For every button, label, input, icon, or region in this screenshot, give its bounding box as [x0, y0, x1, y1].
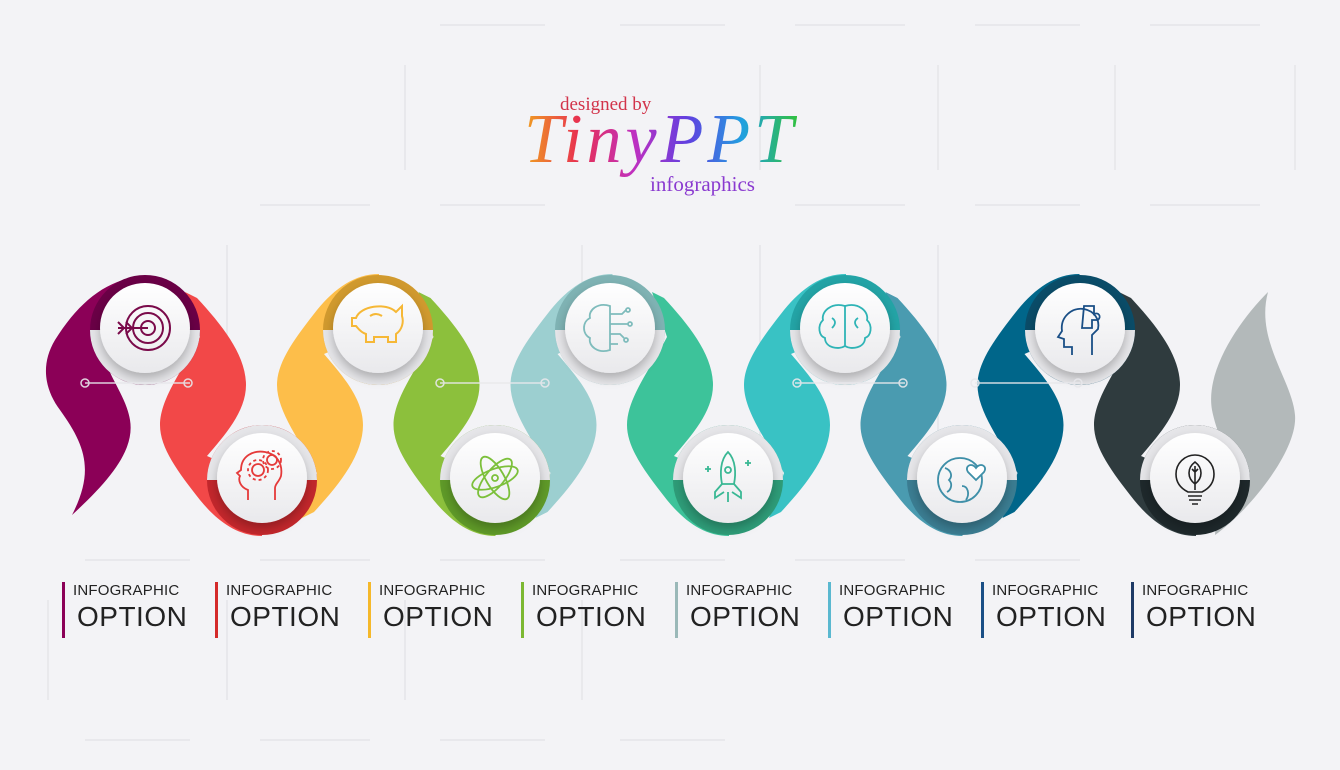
circle 2: gear head	[207, 425, 317, 535]
circle 10: bulb	[1140, 425, 1250, 535]
text: INFOGRAPHIC	[992, 582, 1098, 599]
circle 3: piggy bank	[323, 275, 433, 385]
circle 1: target	[90, 275, 200, 385]
text: INFOGRAPHIC	[226, 582, 332, 599]
circle 4: atom	[440, 425, 550, 535]
labels: OPTION	[77, 601, 187, 632]
circle 9: head puzzle	[1025, 275, 1135, 385]
text: OPTION	[843, 601, 953, 632]
text: INFOGRAPHIC	[379, 582, 485, 599]
circle 6: rocket	[673, 425, 783, 535]
circle 8: globe heart	[907, 425, 1017, 535]
logo: infographics	[650, 172, 755, 196]
circle 5: brain circuit	[555, 275, 665, 385]
text: INFOGRAPHIC	[839, 582, 945, 599]
circle 7: brain puzzle	[790, 275, 900, 385]
logo: TinyPPT	[524, 101, 797, 178]
logo: designed by	[560, 94, 651, 115]
ribbon bands	[46, 274, 1295, 536]
text: OPTION	[1146, 601, 1256, 632]
labels: INFOGRAPHIC	[73, 582, 179, 599]
text: OPTION	[690, 601, 800, 632]
text: OPTION	[536, 601, 646, 632]
text: INFOGRAPHIC	[686, 582, 792, 599]
text: INFOGRAPHIC	[532, 582, 638, 599]
text: OPTION	[230, 601, 340, 632]
text: OPTION	[996, 601, 1106, 632]
labels	[62, 582, 187, 638]
text: INFOGRAPHIC	[1142, 582, 1248, 599]
text: OPTION	[383, 601, 493, 632]
connector lines	[81, 379, 1082, 387]
